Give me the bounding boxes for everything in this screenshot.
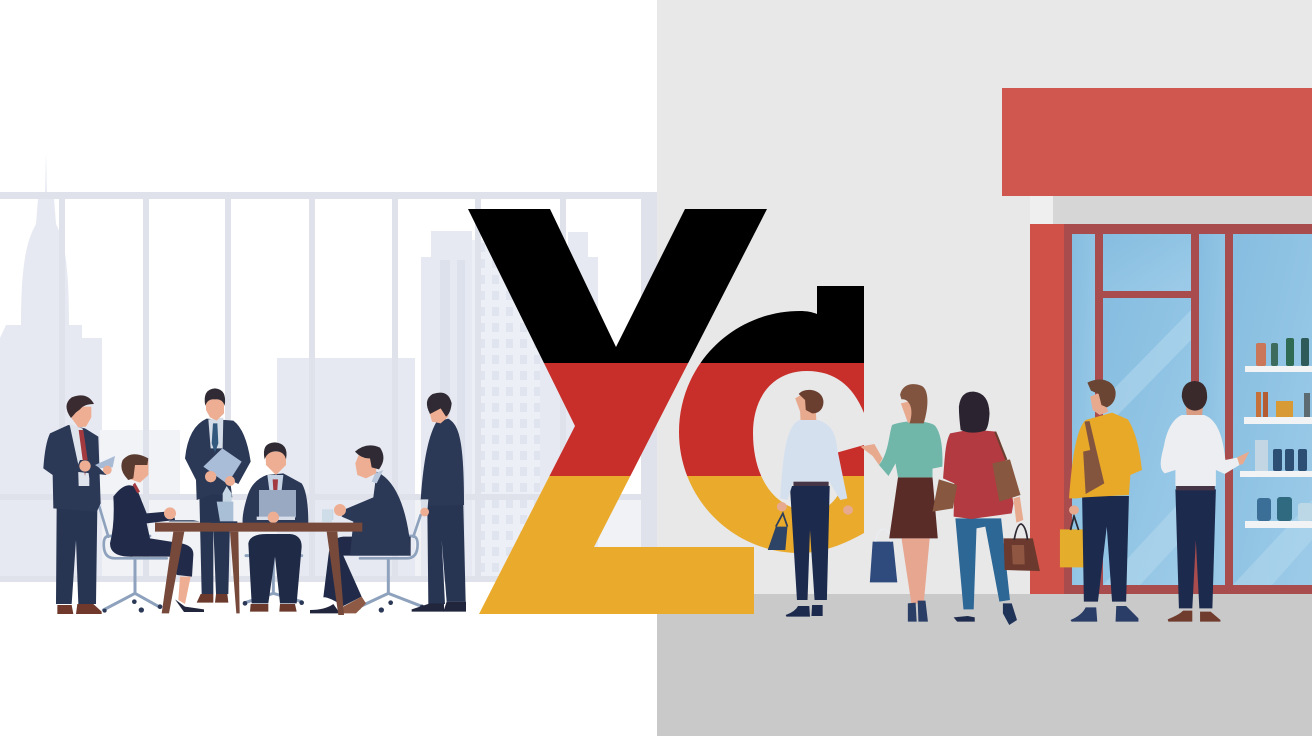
shopper in red jacket (932, 392, 1023, 625)
shoulder bag brown (992, 459, 1021, 502)
panel: office background (0, 0, 657, 736)
office window frame (0, 192, 657, 582)
shopping bag brown (1004, 524, 1040, 571)
logo: German flag monogram (468, 209, 864, 614)
seated woman (110, 454, 204, 612)
office chair left (99, 507, 167, 613)
storefront (1002, 88, 1312, 594)
standing man with folder (185, 388, 251, 603)
store pillar and frames (1030, 224, 1064, 594)
standing man at right (412, 393, 466, 612)
meeting table (155, 523, 362, 615)
seated centre man (243, 442, 308, 612)
shopping bag blue (870, 529, 897, 582)
store windows (1072, 234, 1312, 585)
shopper in white shirt (1161, 381, 1249, 622)
shoppers group (768, 379, 1249, 625)
office chair right (356, 515, 424, 613)
business meeting group (43, 388, 466, 615)
clutch bag brown (932, 479, 957, 512)
glass reflections (1103, 310, 1312, 585)
seated right man (310, 445, 411, 613)
city skyline (0, 152, 598, 580)
panel: retail background (657, 0, 1312, 736)
standing man with tablet (43, 395, 115, 614)
papers and glass on table (168, 509, 332, 523)
shopper in yellow sweater (1060, 379, 1142, 622)
logo left mark (468, 209, 767, 614)
shopper in teal top (860, 384, 943, 622)
logo right mark (679, 286, 864, 553)
store awning (1002, 88, 1312, 196)
shoulder strap bag (1083, 421, 1104, 494)
office chair centre (243, 556, 304, 606)
shopper in blue shirt (768, 390, 853, 617)
bottles on shelves (1255, 338, 1312, 521)
store shelves (1240, 366, 1312, 528)
